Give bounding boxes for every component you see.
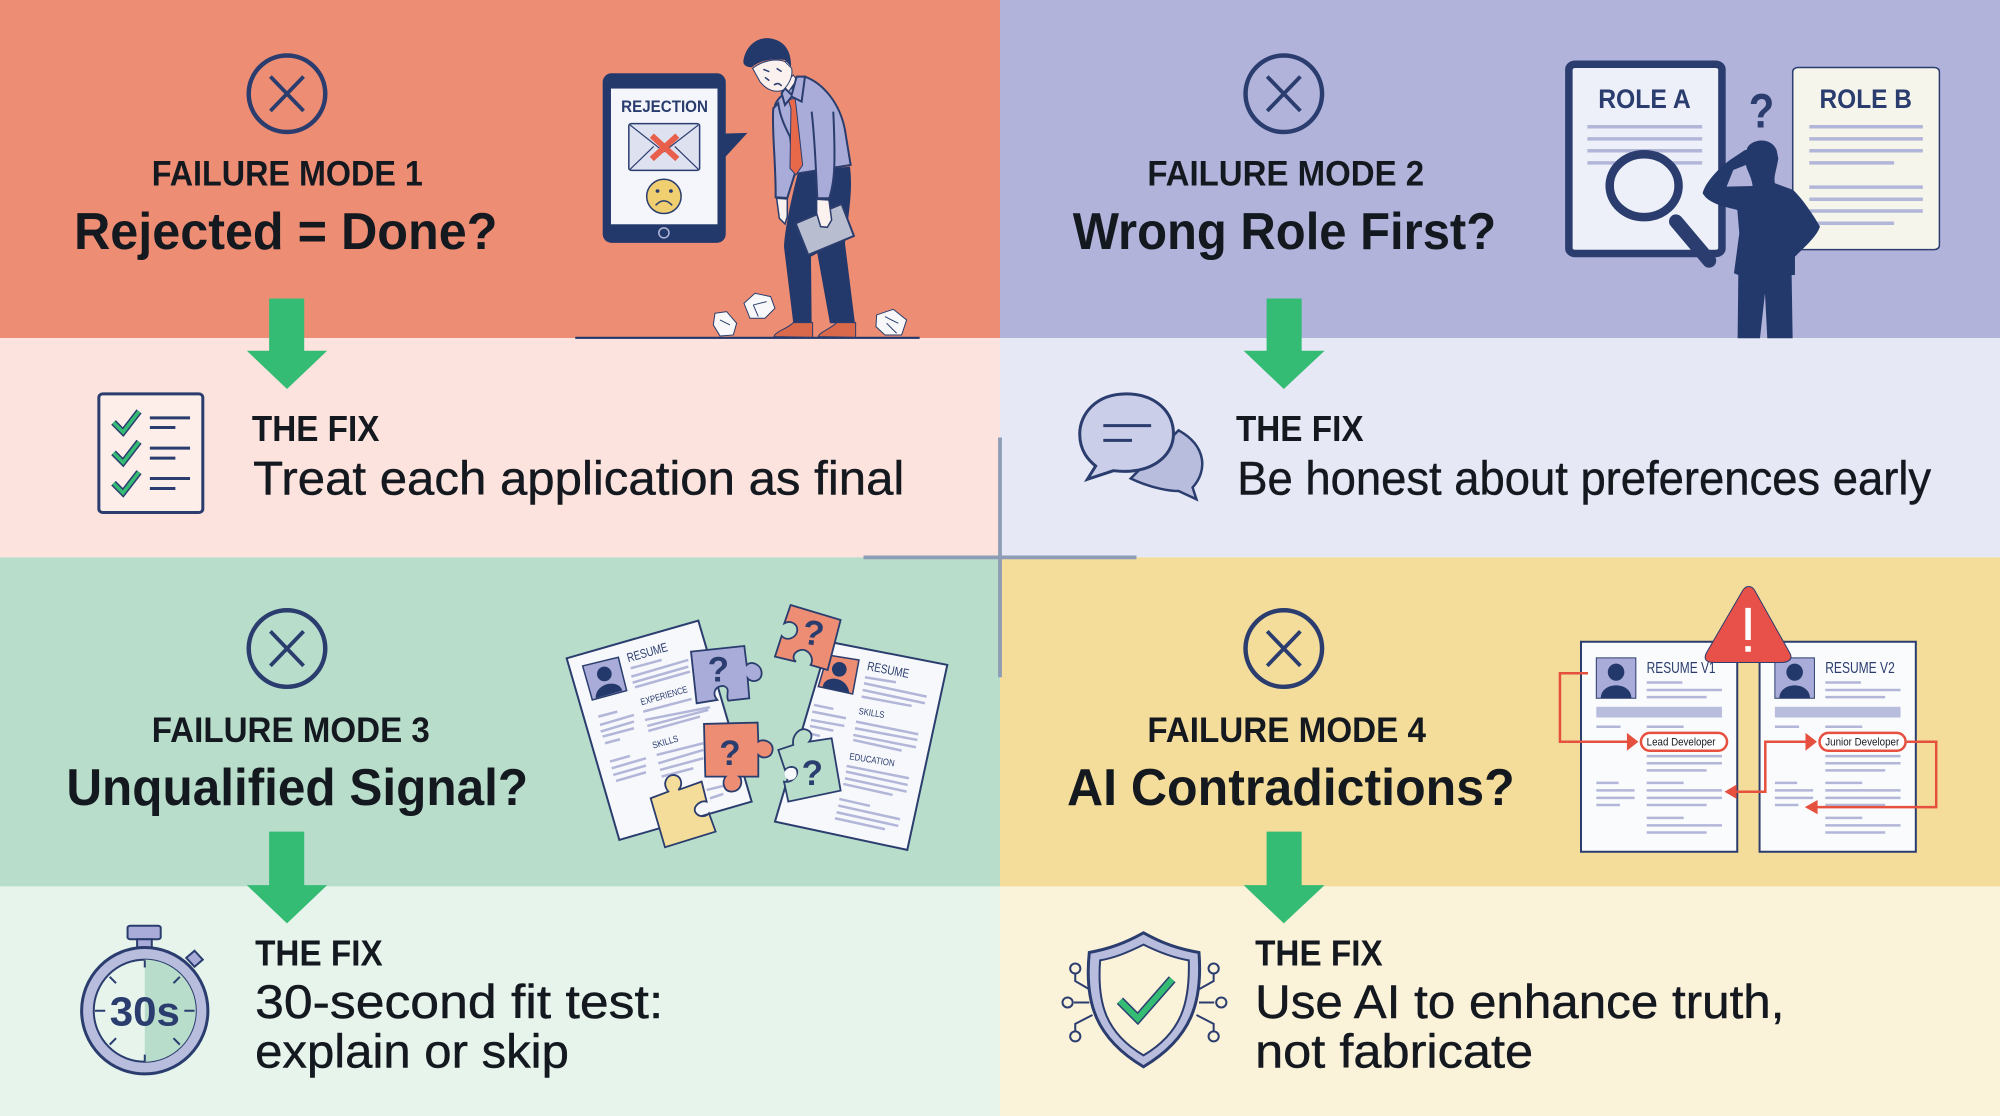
heading: failure mode 4: FAILURE MODE 4 xyxy=(1147,711,1426,750)
back bubble xyxy=(1131,430,1202,499)
right resume photo xyxy=(818,655,859,694)
checks fill xyxy=(114,411,139,493)
panel: failure mode 4 xyxy=(1000,557,2000,1116)
hair xyxy=(743,38,791,67)
role b document xyxy=(1793,67,1939,250)
neck xyxy=(780,75,797,97)
magnifier handle xyxy=(1676,221,1709,261)
icon: x mark xyxy=(270,77,304,111)
30s label: 30s xyxy=(110,988,180,1034)
crown xyxy=(128,926,161,939)
collar xyxy=(782,77,805,105)
v1 lines xyxy=(1596,683,1722,832)
shoes xyxy=(774,323,856,337)
arrow: failure to fix xyxy=(247,832,327,923)
failure band background xyxy=(0,557,1000,886)
hands xyxy=(777,198,832,227)
icon: shield with circuits xyxy=(1062,933,1226,1067)
puzzle: teal xyxy=(778,729,841,802)
stem xyxy=(137,939,152,949)
sad face xyxy=(647,179,681,214)
right sleeve xyxy=(812,112,834,198)
crumpled papers xyxy=(713,293,907,336)
heading: failure mode 2: FAILURE MODE 2 xyxy=(1147,155,1424,194)
icon: checklist xyxy=(99,394,203,512)
fix text xyxy=(1255,976,1784,1079)
icon: x mark xyxy=(1267,77,1300,111)
role b lines xyxy=(1809,127,1923,223)
bubble lines xyxy=(1103,426,1151,440)
fix text line 1: Use AI to enhance truth, xyxy=(1255,976,1784,1029)
check xyxy=(1120,979,1172,1019)
red pill v1 xyxy=(1641,733,1727,751)
ear xyxy=(784,61,791,68)
question mark: ? xyxy=(719,734,741,773)
tablet screen xyxy=(611,89,717,224)
fix label: THE FIX xyxy=(255,934,383,973)
tablet body xyxy=(603,73,726,243)
fix label: THE FIX xyxy=(252,409,380,449)
red arrowheads xyxy=(1627,733,1818,814)
left sleeve xyxy=(773,103,795,198)
ticks xyxy=(95,960,195,1062)
red connector paths xyxy=(1560,673,1936,807)
puzzle: middle orange xyxy=(704,723,773,792)
failure band background xyxy=(1000,557,2000,886)
pants xyxy=(784,167,855,323)
v2 header bar xyxy=(1775,707,1901,718)
fix text xyxy=(255,976,663,1079)
fix label: THE FIX xyxy=(1236,409,1364,449)
left resume xyxy=(567,621,752,840)
left resume photo xyxy=(583,657,627,700)
icon: x in circle xyxy=(1246,610,1322,687)
experience label: EXPERIENCE xyxy=(639,684,689,707)
title: wrong role: Wrong Role First? xyxy=(1073,202,1496,260)
puzzle: lavender xyxy=(691,646,762,703)
v1 photo xyxy=(1596,658,1636,698)
question mark: ? xyxy=(708,651,729,690)
puzzle: yellow xyxy=(651,775,716,847)
resume v1 title: RESUME V1 xyxy=(1647,660,1716,677)
puzzle: top orange xyxy=(775,605,841,670)
fix text: Treat each application as final xyxy=(253,453,904,506)
resume v1 xyxy=(1581,642,1737,852)
tablet label: REJECTION xyxy=(621,97,708,116)
illustration: resumes and puzzle pieces xyxy=(567,605,947,850)
v1 header bar xyxy=(1596,707,1722,718)
role a document xyxy=(1569,64,1722,254)
shield inner xyxy=(1100,945,1189,1055)
face xyxy=(753,60,792,91)
fix text line 2: not fabricate xyxy=(1255,1026,1533,1079)
illustration: contradicting resumes xyxy=(1560,587,1936,852)
fix text line 2: explain or skip xyxy=(255,1026,569,1079)
side button xyxy=(186,951,203,967)
arrow: failure to fix xyxy=(1244,298,1325,389)
envelope xyxy=(629,124,700,170)
role a lines xyxy=(1587,127,1702,163)
front bubble xyxy=(1080,394,1173,479)
tie xyxy=(788,98,803,175)
icon: x mark xyxy=(1267,631,1300,666)
fix band background xyxy=(1000,338,2000,557)
title: rejected: Rejected = Done? xyxy=(74,202,497,260)
question marks xyxy=(708,613,827,793)
failure band background xyxy=(1000,0,2000,338)
question mark: ? xyxy=(800,613,827,654)
fix label: THE FIX xyxy=(1255,934,1383,973)
check outline xyxy=(1120,979,1172,1019)
circuit nodes xyxy=(1062,964,1226,1041)
inner face xyxy=(94,960,196,1062)
exclamation mark xyxy=(1745,608,1751,652)
shield outer xyxy=(1088,933,1200,1067)
question mark: ? xyxy=(1749,85,1774,139)
circuit lines xyxy=(1074,973,1214,1032)
arrow: failure to fix xyxy=(247,298,327,389)
lead developer pill text: Lead Developer xyxy=(1647,736,1716,748)
failure band background xyxy=(0,0,1000,338)
junior developer pill text: Junior Developer xyxy=(1825,736,1899,748)
skills label: SKILLS xyxy=(858,706,885,720)
puzzle: teal hole xyxy=(785,768,797,780)
shirt torso xyxy=(775,77,851,173)
panel: failure mode 1 xyxy=(0,0,1000,557)
panel: failure mode 2 xyxy=(1000,0,2000,557)
right resume lines xyxy=(808,677,927,829)
illustration: rejection tablet xyxy=(575,73,920,339)
tablet pointer xyxy=(714,133,747,158)
outer ring xyxy=(82,947,208,1074)
v2 photo xyxy=(1775,658,1814,698)
fix band background xyxy=(1000,886,2000,1116)
warning triangle xyxy=(1705,587,1791,663)
icon: x in circle xyxy=(249,610,325,687)
left resume lines xyxy=(598,660,723,798)
illustration: dejected man xyxy=(713,38,907,337)
illustration: role comparison xyxy=(1569,64,1939,338)
list lines xyxy=(150,418,190,489)
role a label: ROLE A xyxy=(1598,84,1691,114)
folder xyxy=(796,204,854,255)
icon: x mark xyxy=(270,631,304,666)
role b label: ROLE B xyxy=(1820,84,1912,114)
heading: failure mode 3: FAILURE MODE 3 xyxy=(152,711,430,750)
magnifier lens xyxy=(1610,154,1679,217)
icon: x in circle xyxy=(249,55,325,132)
question mark: ? xyxy=(802,754,823,793)
tablet button xyxy=(659,228,669,238)
right resume xyxy=(775,642,947,850)
v2 lines xyxy=(1775,683,1901,832)
checks xyxy=(114,411,139,493)
icon: x in circle xyxy=(1246,55,1322,132)
icon: stopwatch xyxy=(82,926,208,1074)
panel: failure mode 3 xyxy=(0,557,1000,1116)
heading: failure mode 1: FAILURE MODE 1 xyxy=(152,155,423,194)
checklist page xyxy=(99,394,203,512)
education label: EDUCATION xyxy=(849,751,895,768)
fix text: Be honest about preferences early xyxy=(1237,453,1932,506)
red pill v2 xyxy=(1820,733,1906,751)
left resume label: RESUME xyxy=(625,640,669,665)
arrow: failure to fix xyxy=(1244,832,1325,923)
silhouette xyxy=(1703,141,1820,338)
title: ai contradictions: AI Contradictions? xyxy=(1067,758,1515,816)
resume v2 xyxy=(1760,642,1916,852)
skills label: SKILLS xyxy=(651,734,680,751)
fix band background xyxy=(0,338,1000,557)
fix band background xyxy=(0,886,1000,1116)
title: unqualified: Unqualified Signal? xyxy=(66,758,528,816)
ground line xyxy=(575,337,920,339)
fix text line 1: 30-second fit test: xyxy=(255,976,663,1029)
green half xyxy=(145,960,196,1062)
icon: chat bubbles xyxy=(1080,394,1202,499)
face details xyxy=(763,68,782,86)
right resume label: RESUME xyxy=(866,659,910,681)
resume v2 title: RESUME V2 xyxy=(1825,660,1895,677)
